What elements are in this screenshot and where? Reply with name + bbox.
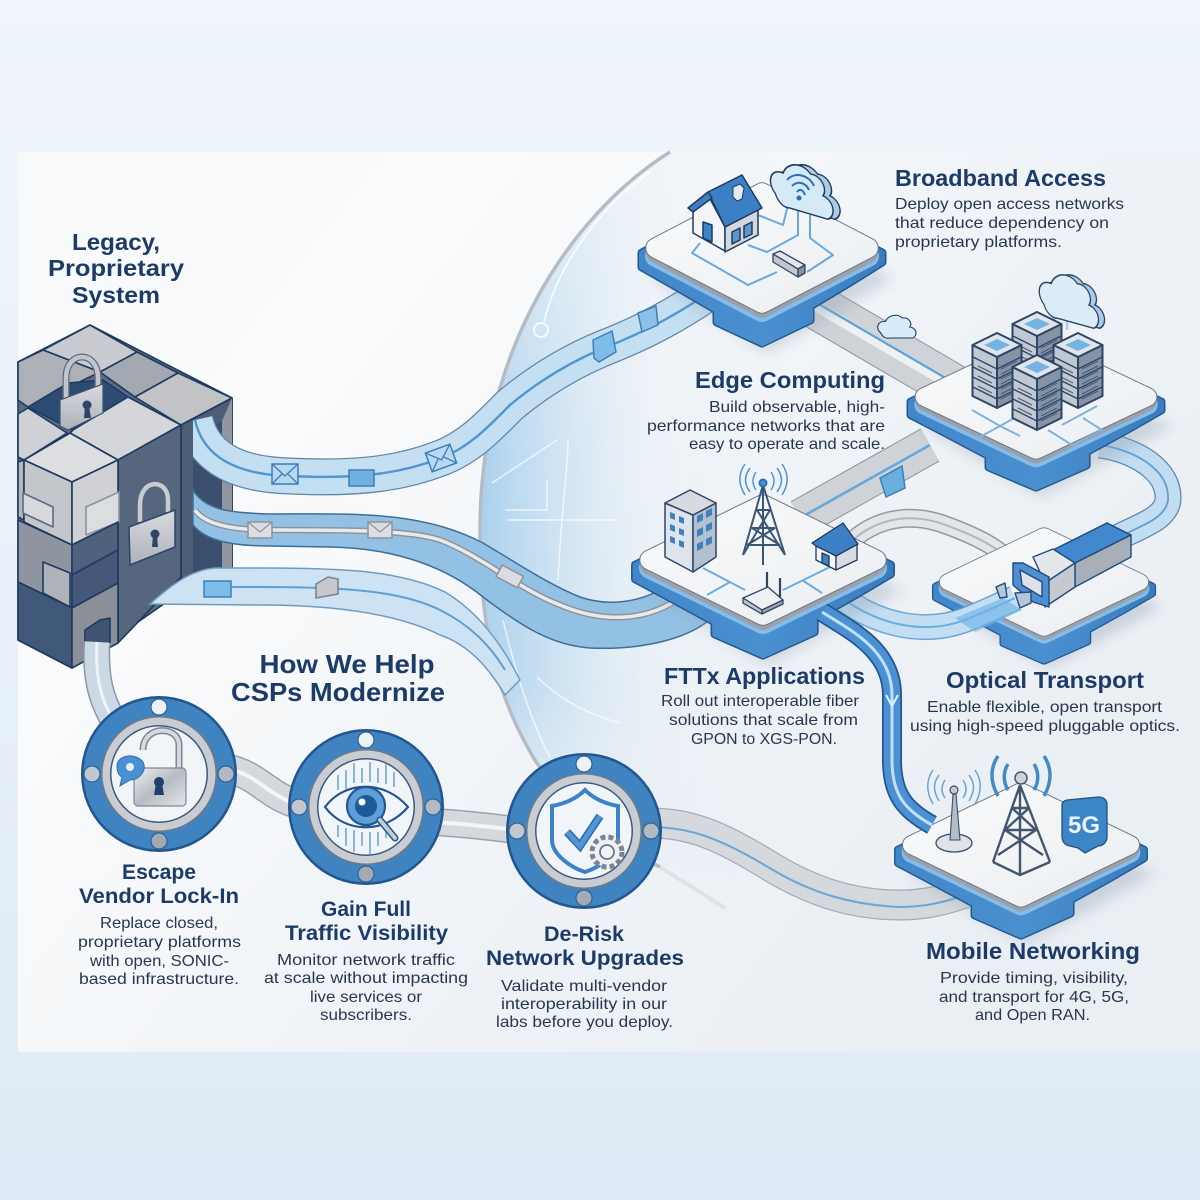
text: FTTx applications: FTTx Applications xyxy=(664,663,865,689)
text: de-risk network upgrades: Validate multi-vendor xyxy=(501,978,668,995)
text: de-risk network upgrades: interoperability in our xyxy=(501,996,668,1013)
icon: router xyxy=(743,572,783,614)
icon: large tower xyxy=(992,756,1050,875)
text: escape vendor lock-in xyxy=(78,861,241,988)
icon: small antenna xyxy=(928,770,980,852)
edge: grid lines xyxy=(972,406,1102,445)
heading: legacy system: Proprietary xyxy=(48,255,184,281)
medallion: escape lock-in xyxy=(81,696,237,852)
text: escape vendor lock-in: proprietary platforms xyxy=(78,934,241,951)
text: edge computing: Build observable, high- xyxy=(709,399,885,416)
icon: small house xyxy=(812,523,858,570)
icon: shield with gear xyxy=(552,790,622,872)
icon: open lock xyxy=(117,731,186,806)
heading: how we help: How We Help xyxy=(260,649,434,679)
text: edge computing: easy to operate and scale. xyxy=(689,436,885,453)
main panel xyxy=(18,152,1200,1052)
legacy block xyxy=(18,325,232,668)
tube from block to first medallion xyxy=(97,642,135,750)
text: de-risk network upgrades: labs before you deploy. xyxy=(496,1014,673,1031)
text: optical transport: Optical Transport xyxy=(946,667,1144,693)
text: FTTx applications: solutions that scale from xyxy=(669,712,858,729)
heading: legacy system: System xyxy=(72,282,160,308)
icon: cloud on connector xyxy=(878,315,916,338)
text: escape vendor lock-in: with open, SONIC- xyxy=(89,953,229,970)
platform: FTTx xyxy=(636,502,903,665)
translucent lens arc xyxy=(478,150,726,910)
text: gain traffic visibility: Gain Full xyxy=(321,898,411,921)
flow band to FTTx xyxy=(193,490,715,648)
fiber: FTTx to mobile xyxy=(822,612,932,825)
text: gain traffic visibility: Traffic Visibility xyxy=(285,922,448,945)
text: escape vendor lock-in: Vendor Lock-In xyxy=(79,885,239,908)
connectors between medallions xyxy=(225,768,965,907)
platform: broadband xyxy=(642,190,894,353)
text: gain traffic visibility xyxy=(264,898,468,1024)
text: gain traffic visibility: subscribers. xyxy=(320,1007,412,1024)
platform: edge computing xyxy=(911,342,1173,497)
text: edge computing: Edge Computing xyxy=(695,367,885,393)
text: de-risk network upgrades xyxy=(486,923,684,1031)
text: gain traffic visibility: at scale without impacting xyxy=(264,970,468,987)
text: escape vendor lock-in: Replace closed, xyxy=(100,915,218,932)
text: edge computing xyxy=(647,367,885,453)
icon: 5G bubble xyxy=(1062,797,1107,853)
icon: cloud above servers xyxy=(1039,268,1105,330)
text: edge computing: performance networks that are xyxy=(647,418,885,435)
data packets on flow bands xyxy=(204,306,658,598)
text: de-risk network upgrades: De-Risk xyxy=(544,923,624,946)
text: broadband access: that reduce dependency on xyxy=(895,215,1109,232)
icon: cell tower xyxy=(740,464,787,565)
text: broadband access: Broadband Access xyxy=(895,165,1106,191)
medallion: traffic visibility xyxy=(288,729,444,885)
icon: house xyxy=(688,175,762,252)
platform: mobile networking xyxy=(899,790,1156,945)
medallion: de-risk xyxy=(506,753,662,909)
text: optical transport: using high-speed pluggable optics. xyxy=(910,718,1180,735)
text: mobile networking: and transport for 4G, 5G, xyxy=(939,989,1129,1006)
icon: building xyxy=(665,490,716,572)
heading: how we help xyxy=(231,649,445,707)
text: gain traffic visibility: live services or xyxy=(310,989,423,1006)
text: mobile networking: Provide timing, visibility, xyxy=(940,970,1128,987)
text: escape vendor lock-in: based infrastructure. xyxy=(79,971,239,988)
platform: optical transport xyxy=(936,534,1163,669)
heading: legacy system: Legacy, xyxy=(72,229,160,255)
text: gain traffic visibility: Monitor network traffic xyxy=(277,952,455,969)
heading: legacy system xyxy=(48,229,184,308)
flow band lower xyxy=(150,568,520,695)
text: optical transport: Enable flexible, open transport xyxy=(927,699,1163,716)
icon: 5G bubble: 5G xyxy=(1068,812,1100,839)
text: mobile networking: and Open RAN. xyxy=(975,1007,1090,1024)
broadband: wires xyxy=(692,205,833,285)
icon: server racks xyxy=(972,312,1102,430)
flow band to broadband xyxy=(195,292,710,477)
cloud links to servers xyxy=(1054,306,1067,330)
fiber connector box xyxy=(880,466,905,497)
text: broadband access: proprietary platforms. xyxy=(895,234,1062,251)
icon: modem xyxy=(773,251,805,277)
network connectors between platforms xyxy=(800,296,1168,552)
flow: FTTx to optical xyxy=(845,598,1015,627)
text: FTTx applications xyxy=(661,663,865,748)
text: optical transport xyxy=(910,667,1180,735)
text: FTTx applications: Roll out interoperable fiber xyxy=(661,693,860,710)
icon: wifi cloud xyxy=(770,157,840,221)
text: broadband access xyxy=(895,165,1124,251)
text: FTTx applications: GPON to XGS-PON. xyxy=(691,731,837,748)
icon: eye and magnifier xyxy=(325,762,408,854)
text: mobile networking xyxy=(926,938,1140,1024)
heading: how we help: CSPs Modernize xyxy=(231,677,445,707)
text: mobile networking: Mobile Networking xyxy=(926,938,1140,964)
text: escape vendor lock-in: Escape xyxy=(122,861,196,884)
icon: pluggable optic module xyxy=(955,523,1131,632)
icon: lock on block side xyxy=(129,484,175,565)
icon: lock on block top xyxy=(60,357,103,430)
text: de-risk network upgrades: Network Upgrades xyxy=(486,947,684,970)
text: broadband access: Deploy open access networks xyxy=(895,196,1124,213)
FTTx: wires xyxy=(703,567,830,595)
